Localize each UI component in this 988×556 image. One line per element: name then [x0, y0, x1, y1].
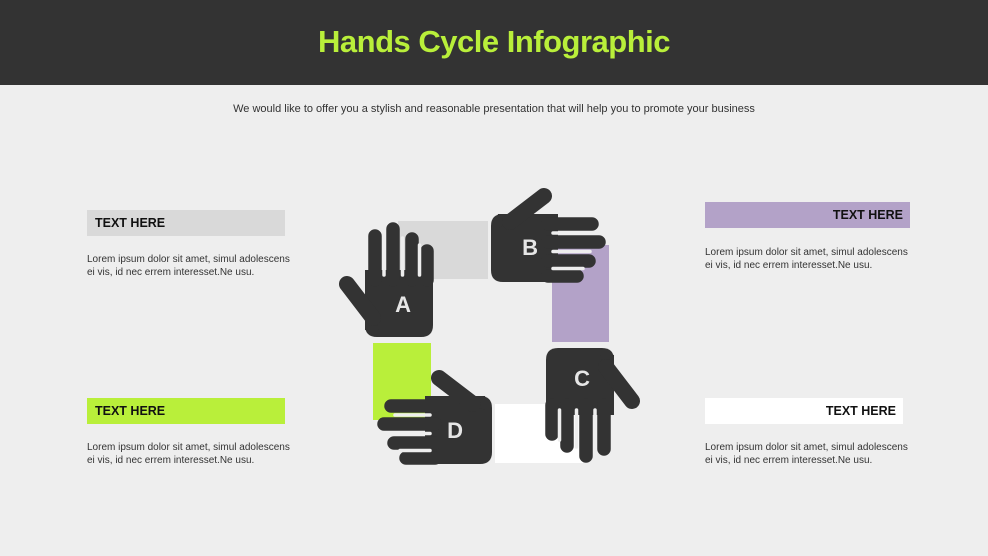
connector: purple: [552, 245, 609, 342]
label box: bottom left: [87, 398, 285, 424]
hand C: C: [574, 366, 590, 391]
label box: bottom right: [705, 398, 903, 424]
hand B: [491, 196, 599, 282]
label box: bottom left: TEXT HERE: [95, 404, 165, 418]
subtitle: We would like to offer you a stylish and reasonable presentation that will help you to promote your business: [233, 103, 755, 115]
hand D: D: [447, 418, 463, 443]
text block: top left: Lorem ipsum dolor sit amet, simul adolescens ei vis, id nec errem interesset.Ne usu.: [87, 254, 290, 278]
connector: gray: [398, 221, 488, 279]
hand A: [347, 229, 433, 337]
header bar: [0, 0, 988, 85]
label box: top left: [87, 210, 285, 236]
hand A: A: [395, 292, 411, 317]
text block: top right: Lorem ipsum dolor sit amet, simul adolescens ei vis, id nec errem interesset.Ne usu.: [705, 247, 908, 270]
label box: bottom right: TEXT HERE: [826, 404, 896, 418]
label box: top right: [705, 202, 910, 228]
hand B: B: [522, 235, 538, 260]
connector: green: [373, 343, 431, 420]
connector: white: [495, 404, 583, 463]
label box: top right: TEXT HERE: [833, 208, 903, 222]
hand C: [546, 348, 632, 456]
title: Hands Cycle Infographic: [318, 24, 670, 59]
text block: bottom left: Lorem ipsum dolor sit amet, simul adolescens ei vis, id nec errem interesset.Ne usu.: [87, 442, 290, 466]
hand D: [384, 378, 492, 464]
label box: top left: TEXT HERE: [95, 216, 165, 230]
text block: bottom right: Lorem ipsum dolor sit amet, simul adolescens ei vis, id nec errem interesset.Ne usu.: [705, 442, 908, 466]
